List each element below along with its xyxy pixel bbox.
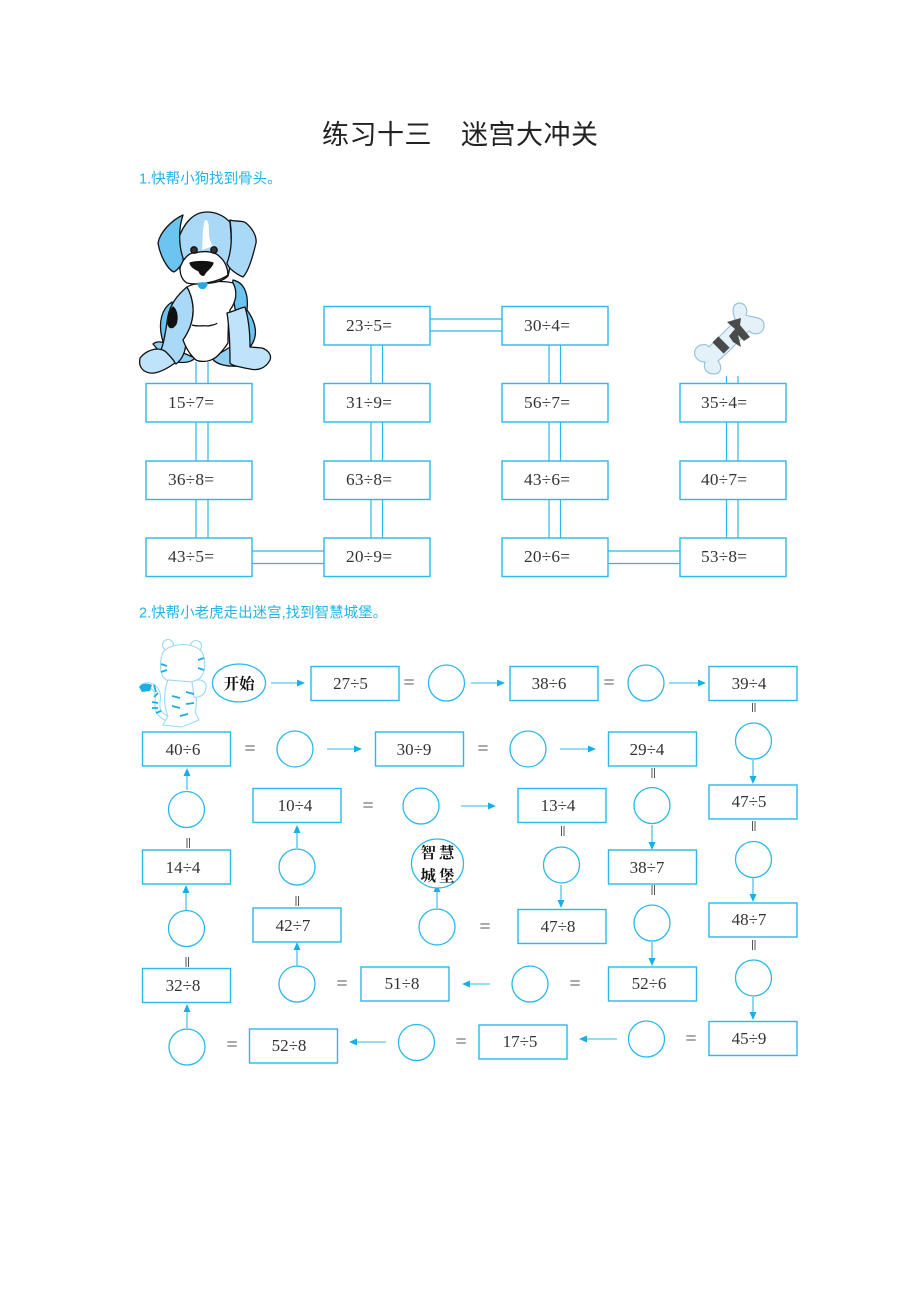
maze 2 boxes: 13÷4 <box>541 796 576 815</box>
castle goal circle <box>412 839 464 888</box>
equals signs: = <box>455 1031 467 1053</box>
start oval <box>212 664 266 702</box>
maze 2 boxes: 38÷7 <box>630 858 665 877</box>
maze 1 boxes: 20÷9= <box>346 547 392 566</box>
castle goal circle: 智慧 <box>420 841 458 863</box>
equals signs: = <box>403 672 415 694</box>
equals signs <box>226 672 697 1056</box>
maze 2 boxes <box>142 666 797 1063</box>
equals signs: = <box>479 916 491 938</box>
maze 2 boxes: 17÷5 <box>503 1032 537 1051</box>
maze 1 boxes: 43÷5= <box>168 547 214 566</box>
answer circles <box>168 665 772 1065</box>
start oval: 开始 <box>223 672 256 694</box>
maze 1 boxes: 15÷7= <box>168 393 214 412</box>
maze 2 boxes: 42÷7 <box>276 916 311 935</box>
maze 1 boxes: 20÷6= <box>524 547 570 566</box>
title part two: 迷宫大冲关 <box>461 120 598 150</box>
maze 2 boxes: 47÷5 <box>732 792 766 811</box>
equals signs: = <box>226 1034 238 1056</box>
icon: dog <box>140 212 271 373</box>
equals signs: = <box>362 795 374 817</box>
maze 2 boxes: 14÷4 <box>166 858 201 877</box>
icon: tiger <box>139 640 206 727</box>
maze 2 boxes: 39÷4 <box>732 674 767 693</box>
maze 2 boxes: 51÷8 <box>385 974 419 993</box>
maze 1 boxes: 43÷6= <box>524 470 570 489</box>
maze 1 boxes: 30÷4= <box>524 316 570 335</box>
vertical equals <box>186 703 755 967</box>
maze 1 boxes: 36÷8= <box>168 470 214 489</box>
maze 1 boxes: 63÷8= <box>346 470 392 489</box>
maze 1 boxes: 31÷9= <box>346 393 392 412</box>
maze 1 boxes: 40÷7= <box>701 470 747 489</box>
maze 1 boxes: 35÷4= <box>701 393 747 412</box>
maze 2 boxes: 27÷5 <box>333 674 368 693</box>
maze 2 boxes: 52÷8 <box>272 1036 306 1055</box>
equals signs: = <box>477 738 489 760</box>
maze 2 boxes: 48÷7 <box>732 910 767 929</box>
maze 2 boxes: 47÷8 <box>541 917 575 936</box>
maze 2 boxes: 29÷4 <box>630 740 665 759</box>
maze 2 boxes: 30÷9 <box>397 740 431 759</box>
maze 1 boxes <box>146 306 786 576</box>
question 1 heading: 1.快帮小狗找到骨头。 <box>139 170 282 188</box>
maze 1 connectors <box>196 319 738 564</box>
maze 2 connectors <box>182 680 756 1046</box>
maze 2 boxes: 40÷6 <box>166 740 200 759</box>
equals signs: = <box>336 973 348 995</box>
maze 2 boxes: 45÷9 <box>732 1029 766 1048</box>
icon: bone <box>695 303 764 374</box>
maze 1 boxes: 53÷8= <box>701 547 747 566</box>
question 2 heading: 2.快帮小老虎走出迷宫,找到智慧城堡。 <box>139 604 387 622</box>
maze 2 boxes: 38÷6 <box>532 674 566 693</box>
title: 练习十三 <box>322 120 432 150</box>
equals signs: = <box>685 1028 697 1050</box>
equals signs: = <box>244 738 256 760</box>
maze 1 boxes: 56÷7= <box>524 393 570 412</box>
equals signs: = <box>569 973 581 995</box>
maze 2 boxes: 10÷4 <box>278 796 313 815</box>
maze 2 boxes: 52÷6 <box>632 974 666 993</box>
maze 2 boxes: 32÷8 <box>166 976 200 995</box>
maze 1 boxes: 23÷5= <box>346 316 392 335</box>
equals signs: = <box>603 672 615 694</box>
castle goal circle: 城堡 <box>420 864 458 886</box>
